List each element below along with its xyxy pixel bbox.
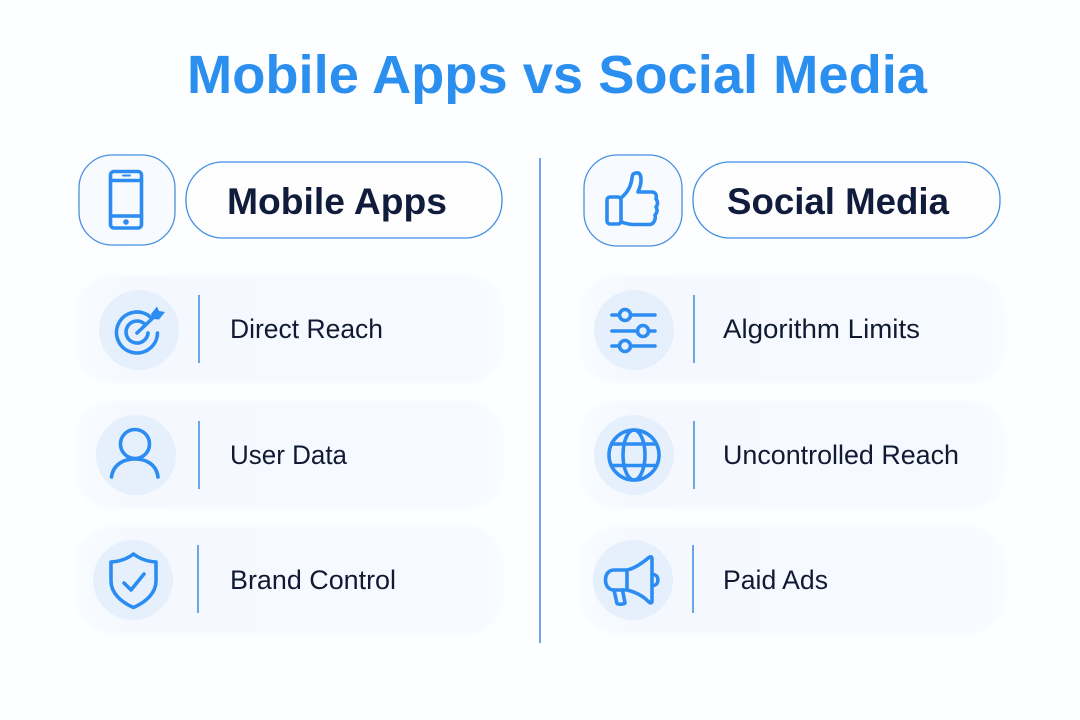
icon: thumbs up xyxy=(584,155,682,246)
heading: mobile apps: Mobile Apps xyxy=(227,181,447,222)
row: paid ads xyxy=(579,526,1006,634)
heading: mobile apps xyxy=(186,162,502,238)
center divider xyxy=(539,158,541,643)
row: uncontrolled reach: Uncontrolled Reach xyxy=(723,440,959,470)
panel: mobile apps xyxy=(75,155,504,634)
row: user data xyxy=(75,401,504,509)
row: brand control: Brand Control xyxy=(230,565,396,595)
row: user data: User Data xyxy=(230,440,348,470)
icon: globe xyxy=(609,430,659,480)
row: algorithm limits: Algorithm Limits xyxy=(723,314,920,344)
icon: shield xyxy=(111,554,156,608)
row: direct reach: Direct Reach xyxy=(230,314,383,344)
heading: social media xyxy=(693,162,1000,238)
row: direct reach xyxy=(75,275,504,383)
title: Mobile Apps vs Social Media xyxy=(187,45,928,105)
icon: megaphone xyxy=(606,557,658,604)
panel: social media xyxy=(579,155,1006,634)
heading: social media: Social Media xyxy=(727,181,949,222)
row: uncontrolled reach xyxy=(579,401,1006,509)
row: paid ads: Paid Ads xyxy=(723,565,828,595)
icon: sliders xyxy=(612,310,655,352)
icon: target xyxy=(117,306,165,353)
row: brand control xyxy=(75,526,504,634)
icon: user xyxy=(112,430,158,477)
icon: mobile phone xyxy=(79,155,175,245)
row: algorithm limits xyxy=(579,275,1006,383)
